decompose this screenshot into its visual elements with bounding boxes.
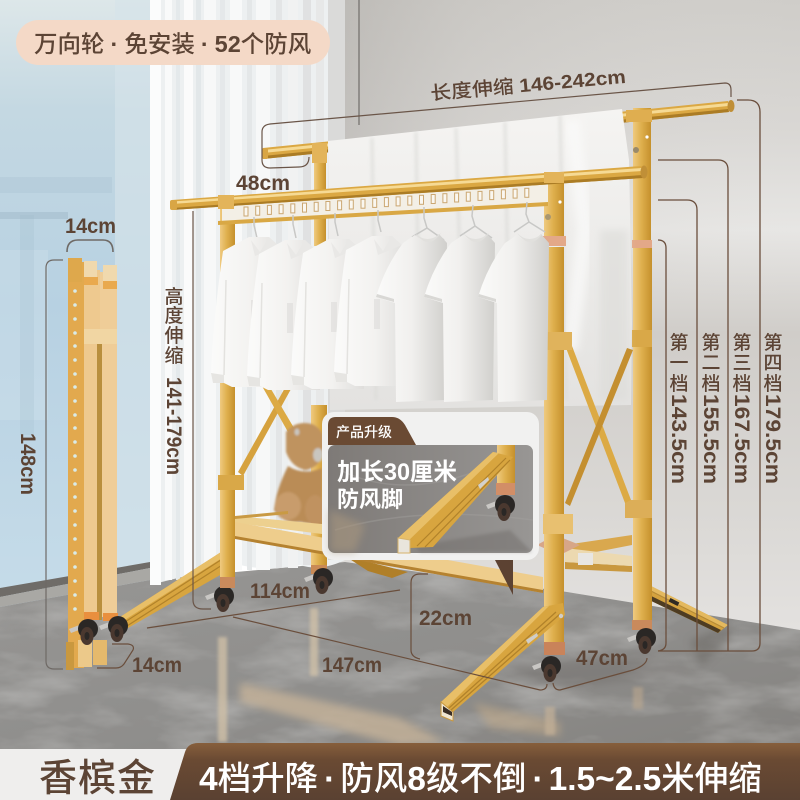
label: gear 3: [730, 332, 753, 484]
callout: upgraded feet: [322, 412, 539, 595]
dimension: 114cm width: [147, 590, 400, 628]
t-shirt 2: [424, 233, 495, 402]
caster: back right: [627, 628, 656, 654]
label: gear 1: [667, 332, 690, 484]
dimension: bottom 14cm: [97, 644, 133, 668]
caster: folded left: [69, 619, 98, 645]
label: 22cm: 22cm: [419, 607, 472, 630]
hangers: [254, 202, 545, 240]
label: gear 4: 179.5cm: [761, 394, 784, 484]
dimension: 22cm: [411, 574, 428, 659]
label: gear 4: 第四档: [763, 332, 783, 395]
label: 148cm: 148cm: [16, 433, 39, 495]
dimension: gear 3: [658, 160, 728, 651]
background: floor: [0, 562, 800, 750]
label: bottom 14cm: 14cm: [132, 654, 182, 677]
label: gear 3: 167.5cm: [730, 394, 753, 484]
label: length: 长度伸缩 146-242cm: [430, 66, 627, 105]
bottom band: colour name: [0, 749, 200, 800]
shirt 4: [334, 236, 408, 386]
X brace: left: [238, 384, 294, 476]
caster: front right: [532, 656, 561, 682]
top feature pill: [16, 20, 330, 65]
caster: folded right: [99, 616, 128, 642]
label: height stretch: [162, 286, 185, 475]
label: gear 1: 第一档: [669, 332, 689, 395]
dimension: gear 4: [658, 100, 760, 651]
label: 114cm: 114cm: [250, 580, 310, 603]
callout subhead: 防风脚: [337, 487, 403, 512]
back right collar: [632, 240, 652, 248]
dimension: 147cm length: [233, 617, 547, 690]
callout tab label: 产品升级: [336, 424, 392, 440]
teddy bear: [274, 423, 325, 526]
bottom band: features: [170, 743, 800, 800]
callout tab: [328, 417, 416, 445]
shirt 2: [247, 240, 321, 390]
shirt 1: [211, 237, 285, 387]
background: wall: [330, 0, 800, 640]
label: 14cm top: 14cm: [65, 215, 116, 238]
floor marble texture: [0, 560, 800, 750]
pill text: 万向轮 · 免安装 · 52个防风: [34, 31, 311, 57]
short middle leg foot: [311, 565, 327, 574]
dimension: folded width: [67, 240, 113, 252]
front rack: left post: [218, 205, 244, 588]
dimension: folded height: [46, 260, 63, 669]
label: gear 2: 第二档: [701, 332, 721, 395]
callout headline: 加长30厘米: [337, 459, 457, 486]
background: window: [0, 0, 150, 610]
label: gear 4: [761, 332, 784, 484]
dimension: length: [262, 83, 731, 168]
dimension: height stretch: [193, 211, 211, 609]
t-shirt 1: [376, 233, 447, 402]
label: gear 1: 143.5cm: [667, 394, 690, 484]
back rack: dark rear foot: [345, 556, 408, 578]
dimension: gear 1: [658, 240, 666, 651]
caster: middle: [304, 568, 333, 594]
label: height stretch: 141-179cm: [162, 377, 185, 475]
front top bar: [170, 166, 648, 210]
callout pointer: [495, 560, 513, 595]
dimension: gear 2: [658, 200, 697, 651]
shirt 3: [291, 239, 365, 389]
back rack: right foot: [643, 583, 728, 633]
floor reflections: [218, 608, 730, 746]
dimension: 47cm: [553, 658, 647, 690]
hanging white sheet: [328, 109, 632, 410]
front right collar: [543, 236, 566, 246]
shelf: [235, 511, 632, 593]
label: 147cm: 147cm: [322, 654, 382, 677]
callout photo: [328, 445, 533, 553]
front rack: right foot: [441, 603, 565, 721]
label: height stretch: 高度伸缩: [164, 286, 184, 367]
label: gear 2: 155.5cm: [699, 394, 722, 484]
back rack: right post: [625, 108, 652, 630]
caster: front left: [205, 586, 234, 612]
label: 48cm: 48cm: [236, 172, 290, 195]
colour name text: 香槟金: [39, 758, 155, 800]
label: 47cm: 47cm: [576, 647, 628, 670]
label: gear 2: [699, 332, 722, 484]
t-shirt 3: [478, 233, 549, 402]
back rack: left post and lower leg: [311, 146, 327, 573]
hanger rail: [218, 183, 548, 225]
back rack: top bar: [262, 100, 734, 163]
front rack: right post: [543, 172, 573, 655]
X brace: right: [565, 346, 633, 506]
label: gear 3: 第三档: [732, 332, 752, 395]
front rack: left foot: [120, 545, 234, 628]
folded rack: [66, 258, 118, 670]
background: curtain: [150, 0, 345, 585]
features text: 4档升降·防风8级不倒·1.5~2.5米伸缩: [199, 761, 762, 798]
